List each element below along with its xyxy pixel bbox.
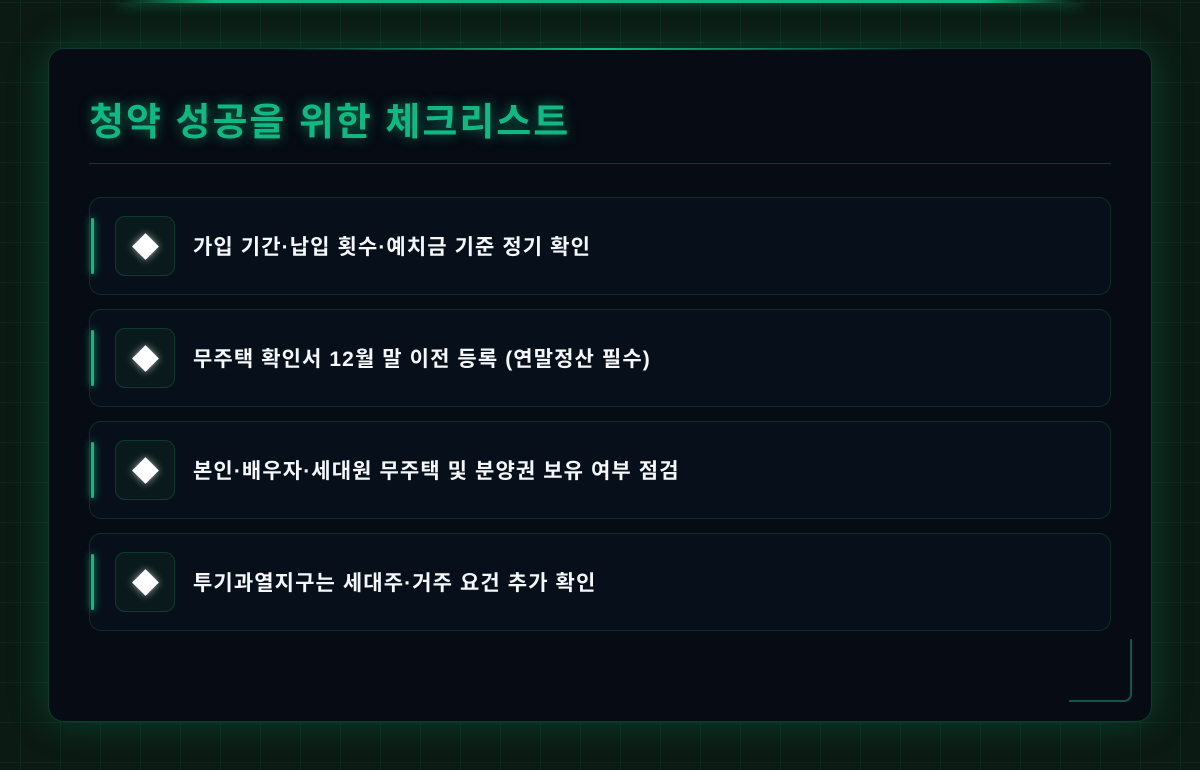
text 1: 가입 기간·납입 횟수·예치금 기준 정기 확인 [193, 236, 591, 259]
item 4 [89, 533, 1111, 631]
icon: diamond [115, 216, 175, 276]
title: 청약 성공을 위한 체크리스트 [89, 102, 570, 144]
item 2 [89, 309, 1111, 407]
icon: diamond [115, 552, 175, 612]
corner bracket [1069, 639, 1132, 702]
icon: diamond [115, 440, 175, 500]
text 4: 투기과열지구는 세대주·거주 요건 추가 확인 [193, 572, 596, 595]
item 1 [89, 197, 1111, 295]
text 3: 본인·배우자·세대원 무주택 및 분양권 보유 여부 점검 [193, 460, 680, 483]
icon: diamond [115, 328, 175, 388]
text 2: 무주택 확인서 12월 말 이전 등록 (연말정산 필수) [193, 348, 651, 371]
item 3 [89, 421, 1111, 519]
